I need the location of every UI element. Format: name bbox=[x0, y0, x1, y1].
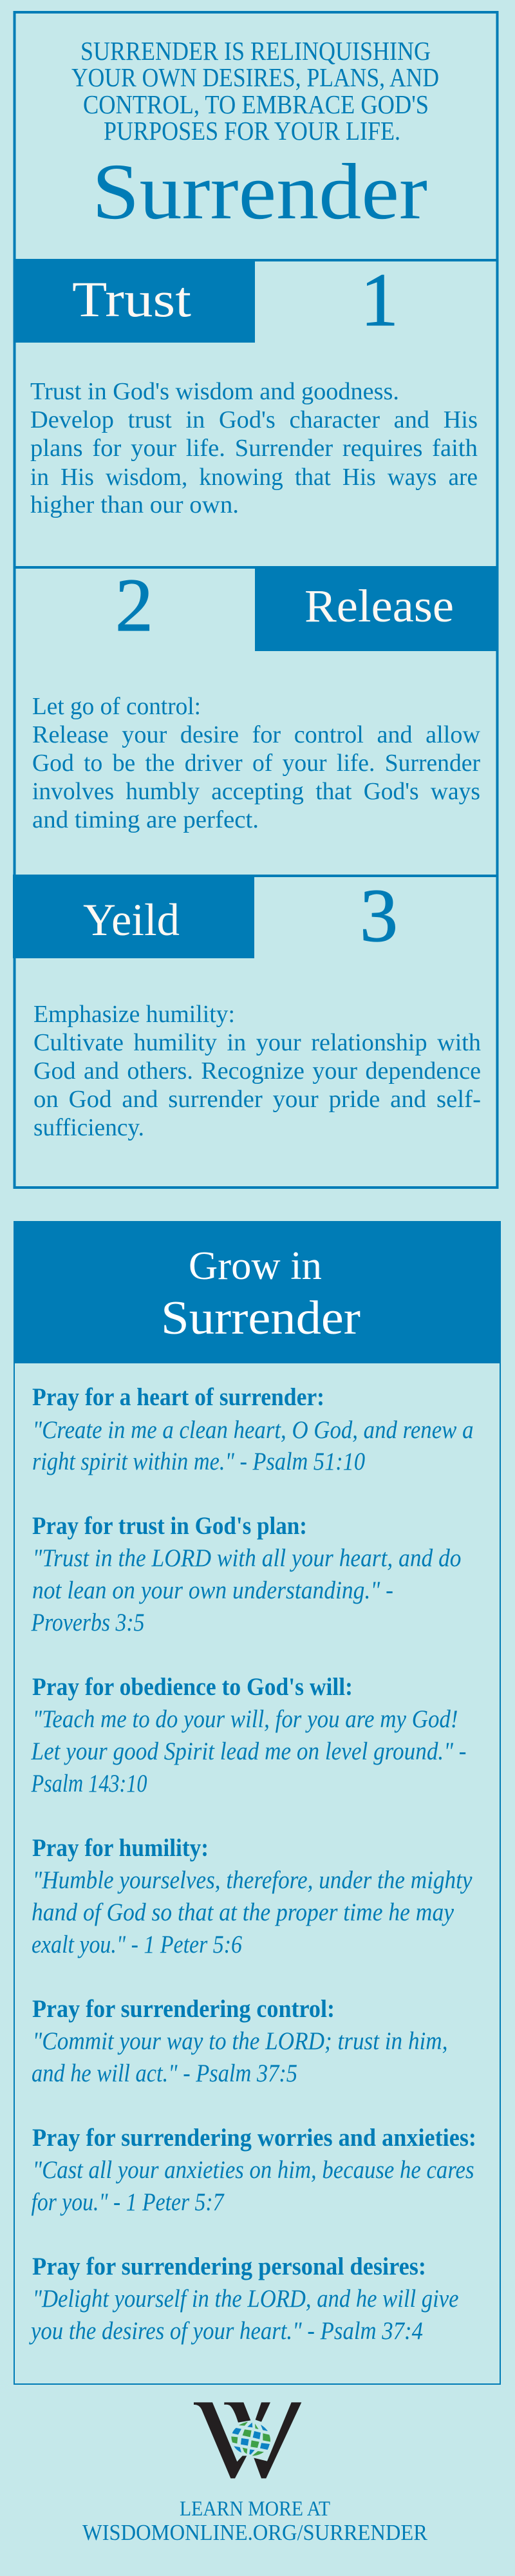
prayer 7: Pray for surrendering personal desires: bbox=[32, 2253, 426, 2280]
prayer 6: Pray for surrendering worries and anxieties: bbox=[32, 2124, 476, 2152]
definition text: YOUR OWN DESIRES, PLANS, AND bbox=[71, 62, 439, 92]
definition text: CONTROL, TO EMBRACE GOD'S bbox=[83, 90, 429, 119]
prayer 3 bbox=[31, 1673, 467, 1797]
body text: yeild: Emphasize humility: bbox=[33, 1001, 235, 1028]
panel: surrender steps bbox=[13, 12, 498, 1188]
body text: yeild: sufficiency. bbox=[33, 1114, 144, 1141]
call to action: LEARN MORE AT bbox=[180, 2497, 330, 2521]
prayer 7 bbox=[28, 2253, 458, 2345]
prayer 2: Proverbs 3:5 bbox=[31, 1609, 144, 1636]
prayer 2: "Trust in the LORD with all your heart, and do bbox=[32, 1544, 461, 1572]
prayer 7: you the desires of your heart." - Psalm 37:4 bbox=[28, 2317, 423, 2345]
prayer 5: Pray for surrendering control: bbox=[32, 1995, 335, 2023]
body text: yeild: Cultivate humility in your relationship with bbox=[33, 1029, 481, 1056]
prayer 5: and he will act." - Psalm 37:5 bbox=[32, 2060, 297, 2087]
panel frame bbox=[14, 12, 497, 1188]
body text: yeild bbox=[33, 1001, 481, 1141]
prayer 5: "Commit your way to the LORD; trust in him, bbox=[32, 2027, 448, 2055]
prayer 4: hand of God so that at the proper time he may bbox=[32, 1899, 454, 1926]
body text: release: and timing are perfect. bbox=[32, 806, 259, 833]
body text: trust bbox=[30, 378, 478, 518]
prayer 4 bbox=[32, 1834, 473, 1958]
divider bbox=[14, 259, 498, 261]
body text: release: God to be the driver of your life. Surrender bbox=[32, 750, 480, 777]
prayer 6: "Cast all your anxieties on him, because he cares bbox=[32, 2156, 474, 2184]
body text: yeild: God and others. Recognize your dependence bbox=[33, 1057, 481, 1084]
body text: trust: Trust in God's wisdom and goodness. bbox=[30, 378, 399, 405]
prayer 1: "Create in me a clean heart, O God, and renew a bbox=[32, 1416, 474, 1444]
prayer 4: "Humble yourselves, therefore, under the mighty bbox=[32, 1866, 473, 1894]
divider bbox=[14, 875, 498, 877]
prayer 4: Pray for humility: bbox=[32, 1834, 209, 1862]
prayer 3: "Teach me to do your will, for you are my God! bbox=[32, 1705, 458, 1733]
heading box: yeild: Yeild bbox=[83, 895, 180, 945]
body text: trust: plans for your life. Surrender requires faith bbox=[30, 435, 478, 462]
prayer 3: Psalm 143:10 bbox=[31, 1770, 147, 1797]
header band bbox=[14, 1221, 501, 1363]
number 2: 2 bbox=[115, 563, 153, 647]
prayer 1: right spirit within me." - Psalm 51:10 bbox=[32, 1448, 365, 1475]
body text: trust: Develop trust in God's character and His bbox=[30, 406, 478, 433]
heading box: yeild bbox=[13, 875, 254, 958]
body text: release: Release your desire for control and allow bbox=[32, 721, 481, 748]
number 3: 3 bbox=[360, 873, 398, 958]
prayer 3: Let your good Spirit lead me on level ground." - bbox=[31, 1738, 467, 1765]
body text: release: Let go of control: bbox=[32, 693, 201, 720]
prayer 7: "Delight yourself in the LORD, and he will give bbox=[32, 2285, 458, 2313]
body text: trust: in His wisdom, knowing that His ways are bbox=[30, 464, 478, 491]
prayer 4: exalt you." - 1 Peter 5:6 bbox=[32, 1931, 242, 1958]
heading box: release: Release bbox=[304, 580, 454, 632]
prayer 1: Pray for a heart of surrender: bbox=[32, 1383, 324, 1411]
header band: Grow in bbox=[189, 1244, 322, 1288]
section 3: yeild bbox=[13, 873, 498, 1141]
section 1: trust bbox=[14, 258, 498, 518]
call to action bbox=[82, 2497, 428, 2545]
divider bbox=[14, 566, 498, 569]
heading box: release bbox=[255, 567, 498, 651]
prayer 3: Pray for obedience to God's will: bbox=[32, 1673, 353, 1701]
prayer 6 bbox=[31, 2124, 476, 2216]
panel frame bbox=[14, 1222, 500, 2384]
section 2: release bbox=[14, 563, 498, 833]
body text: yeild: on God and surrender your pride and self- bbox=[33, 1086, 481, 1113]
call to action: WISDOMONLINE.ORG/SURRENDER bbox=[82, 2520, 428, 2545]
body text: trust: higher than our own. bbox=[30, 491, 239, 518]
heading box: trust: Trust bbox=[72, 271, 191, 327]
body text: release: involves humbly accepting that God's ways bbox=[32, 778, 480, 805]
definition text: PURPOSES FOR YOUR LIFE. bbox=[104, 116, 400, 146]
body text: release bbox=[32, 693, 481, 833]
definition text: SURRENDER IS RELINQUISHING bbox=[80, 36, 431, 66]
heading box: trust bbox=[14, 259, 255, 343]
prayer 1 bbox=[32, 1383, 474, 1475]
number 1: 1 bbox=[360, 258, 398, 342]
title: Surrender bbox=[92, 147, 427, 236]
prayer 2 bbox=[31, 1512, 461, 1636]
prayer 2: not lean on your own understanding." - bbox=[32, 1577, 393, 1604]
panel: grow in surrender bbox=[14, 1221, 501, 2384]
prayer 6: for you." - 1 Peter 5:7 bbox=[31, 2188, 225, 2216]
definition text bbox=[71, 36, 439, 146]
prayer 2: Pray for trust in God's plan: bbox=[32, 1512, 307, 1540]
icon: wisdom online logo bbox=[194, 2402, 301, 2478]
prayer 5 bbox=[32, 1995, 448, 2087]
header band: Surrender bbox=[161, 1292, 360, 1345]
